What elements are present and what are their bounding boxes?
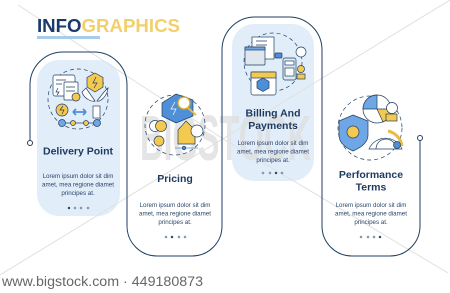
pagination dots: pricing: [165, 236, 186, 238]
heading: performance terms: Performance: [339, 169, 403, 181]
icon: delivery point: [48, 69, 108, 129]
text: pricing body: principes at.: [158, 219, 192, 226]
heading: pricing: Pricing: [157, 173, 193, 185]
panel: delivery point background: [37, 60, 120, 216]
heading: billing and payments: Billing And: [245, 108, 301, 120]
heading: billing and payments: Payments: [248, 120, 298, 132]
panel: billing and payments background: [232, 24, 314, 181]
heading: delivery point: Delivery Point: [43, 146, 114, 158]
pagination dots: delivery point: [68, 207, 89, 209]
icon: pricing: [145, 94, 205, 155]
text: billing body: amet, mea regione diamet: [237, 148, 309, 155]
text: pricing body: amet, mea regione diamet: [139, 210, 211, 217]
text: performance body: principes at.: [354, 219, 388, 226]
connecting outline: [28, 17, 422, 256]
pagination dots: performance: [360, 236, 381, 238]
text: performance body: amet, mea regione diamet: [335, 210, 407, 217]
icon: performance terms: [338, 95, 402, 160]
heading: performance terms: Terms: [356, 181, 387, 193]
text: performance body: Lorem ipsum dolor sit dim: [336, 202, 406, 209]
text: billing body: principes at.: [256, 157, 290, 164]
text: delivery point body: Lorem ipsum dolor sit dim: [43, 173, 113, 180]
text: pricing body: Lorem ipsum dolor sit dim: [140, 202, 210, 209]
title underline: [37, 36, 100, 39]
pagination dots: billing: [262, 172, 283, 174]
footer: stock credit: www.bigstock.com · 449180873: [1, 274, 203, 289]
text: delivery point body: amet, mea regione diamet: [42, 181, 114, 188]
text: delivery point body: principes at.: [61, 190, 95, 197]
title: INFOGRAPHICS: [37, 15, 180, 36]
text: billing body: Lorem ipsum dolor sit dim: [238, 140, 308, 147]
icon: billing and payments: [244, 33, 306, 95]
